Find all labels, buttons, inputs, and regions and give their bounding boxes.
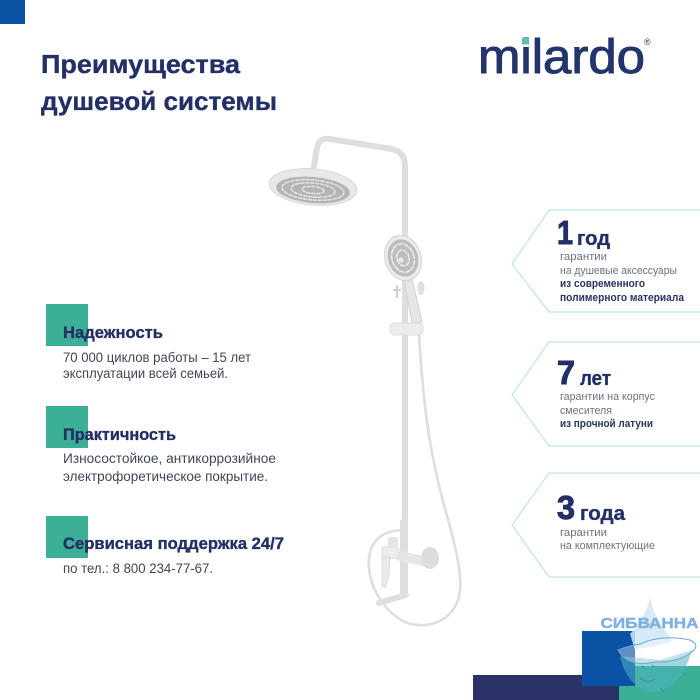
bottom corner blocks	[473, 631, 700, 700]
shower system illustration	[268, 139, 460, 625]
panel: practicality	[46, 406, 276, 484]
panel: service support: по тел.: 8 800 234-77-67.	[63, 561, 213, 576]
panel: 1 year warranty: год	[577, 228, 610, 250]
panel: 1 year warranty: на душевые аксессуары	[560, 265, 677, 277]
panel: 1 year warranty: 1	[557, 214, 573, 251]
sliding rail	[402, 280, 408, 522]
panel: 3 years warranty: на комплектующие	[560, 540, 655, 552]
lower sleeve	[400, 522, 408, 592]
riser pipe and arm	[313, 139, 405, 240]
mixer	[382, 537, 439, 588]
title	[41, 49, 277, 116]
spout	[379, 595, 406, 603]
panel: 7 years warranty: смесителя	[560, 405, 612, 417]
panel: practicality: электрофоретическое покрытие.	[63, 469, 268, 484]
panel: reliability: 70 000 циклов работы – 15 лет	[63, 350, 251, 365]
panel: 7 years warranty: гарантии на корпус	[560, 391, 655, 403]
drop	[630, 597, 672, 650]
corner square	[0, 0, 25, 24]
panel: 3 years warranty: гарантии	[560, 527, 607, 539]
watermark: Сибванна logo	[600, 597, 699, 692]
title: Преимущества	[41, 49, 241, 79]
panel: 7 years warranty: из прочной латуни	[560, 418, 653, 430]
watermark: Сибванна logo: СИБВАННА	[600, 615, 699, 632]
hand shower	[379, 231, 427, 323]
panel: 7 years warranty: 7	[557, 354, 575, 391]
panel: 1 year warranty: полимерного материала	[560, 292, 685, 304]
panel: practicality: Износостойкое, антикоррозийное	[63, 451, 276, 466]
logo: milardo: ®	[644, 37, 651, 47]
panel: practicality: Практичность	[63, 426, 176, 444]
panel: 1 year warranty: гарантии	[560, 251, 607, 263]
panel: 3 years warranty	[512, 473, 700, 577]
panel: 7 years warranty	[512, 342, 700, 446]
face	[640, 665, 687, 692]
panel: reliability: эксплуатации всей семьей.	[63, 366, 228, 381]
panel: reliability	[46, 304, 251, 381]
tub rim	[618, 638, 696, 664]
hook	[394, 286, 400, 297]
panel: 7 years warranty: лет	[580, 368, 611, 390]
panel: reliability: Надежность	[63, 324, 163, 342]
panel: service support: Сервисная поддержка 24/7	[63, 535, 284, 553]
panel: service support	[46, 516, 284, 576]
tub body	[620, 650, 692, 692]
slider bracket	[390, 323, 423, 335]
panel: 1 year warranty: из современного	[560, 278, 645, 290]
overhead shower head	[268, 165, 358, 209]
title: душевой системы	[41, 86, 277, 116]
logo: milardo: milardo	[478, 31, 645, 84]
panel: 1 year warranty	[512, 210, 700, 312]
panel: 3 years warranty: года	[580, 503, 626, 525]
panel: 3 years warranty: 3	[557, 489, 575, 526]
hose	[369, 335, 460, 625]
